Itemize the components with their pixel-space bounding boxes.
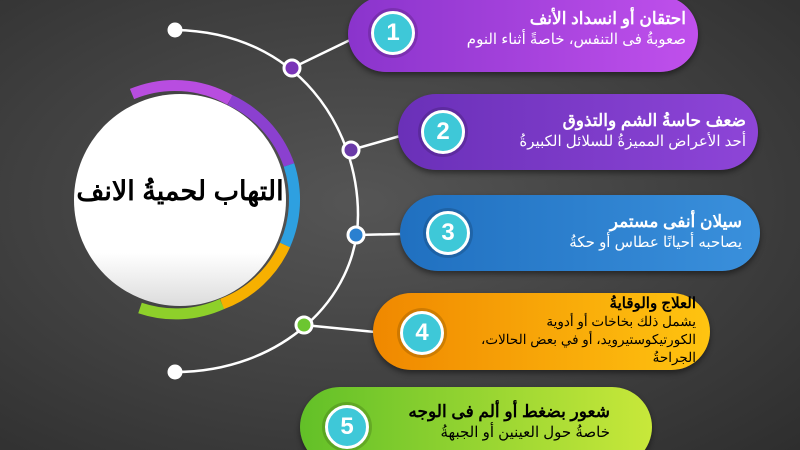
pill 5: خاصةُ حول العينين أو الجبهةُ (440, 424, 610, 441)
pill 1 (348, 0, 698, 72)
pill 2: 2 (436, 118, 450, 145)
colored ring around center (132, 85, 295, 314)
pill 2: ضعف حاسةُ الشم والتذوق (563, 111, 746, 130)
pill 4: الكورتيكوستيرويد، أو في بعض الحالات، (481, 332, 696, 347)
center title: التهاب لحميةُ الانف (76, 176, 284, 206)
pill 2: أحد الأعراض المميزةُ للسلائل الكبيرةُ (519, 133, 746, 150)
pill 4: يشمل ذلك بخاخات أو أدوية (546, 314, 696, 329)
pill 3 (400, 195, 760, 271)
pill 5: 5 (340, 413, 354, 440)
pill 5: شعور بضغط أو ألم فى الوجه (408, 402, 610, 421)
pill 2 (398, 94, 758, 170)
pill 3: سيلان أنفى مستمر (610, 212, 742, 231)
pill 4 (373, 293, 710, 370)
pill 4: الجراحةُ (653, 350, 696, 365)
pill 3: 3 (441, 219, 455, 246)
pill 1: 1 (386, 19, 400, 46)
pill 3: يصاحبه أحيانًا عطاس أو حكةُ (569, 234, 742, 251)
pill 1: احتقان أو انسداد الأنف (530, 9, 686, 28)
pill 4: 4 (415, 319, 429, 346)
pill 4: العلاج والوقايةُ (610, 295, 696, 312)
pill 5 (300, 387, 652, 450)
pill 1: صعوبةُ فى التنفس، خاصةً أثناء النوم (467, 31, 686, 48)
